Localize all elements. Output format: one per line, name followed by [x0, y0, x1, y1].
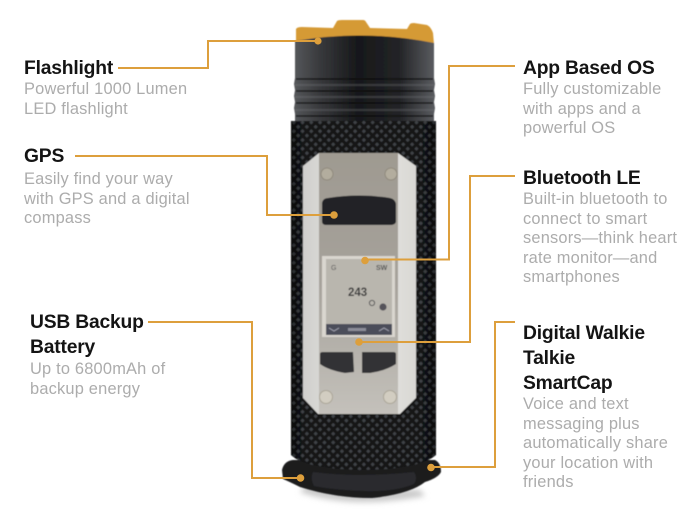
text block: Digital Walkie Talkie SmartCap: Voice and text	[523, 395, 629, 413]
text block: Digital Walkie Talkie SmartCap: automatically share	[523, 434, 668, 452]
text block: Digital Walkie Talkie SmartCap	[523, 323, 668, 491]
text block: Flashlight: Powerful 1000 Lumen	[24, 80, 187, 98]
text block: App Based OS	[523, 58, 661, 137]
device: gold top cap	[296, 20, 434, 44]
text block: Bluetooth LE: connect to smart	[523, 210, 647, 228]
device: steel front plate	[303, 153, 416, 414]
text block: GPS: with GPS and a digital	[24, 190, 190, 208]
text block: USB Backup Battery	[30, 312, 166, 398]
leader: walkie talkie	[427, 322, 515, 471]
text block: Flashlight: Flashlight	[24, 58, 113, 79]
text block: Digital Walkie Talkie SmartCap: Talkie	[523, 348, 575, 369]
device: knurled body	[291, 121, 436, 470]
text block: USB Backup Battery: Up to 6800mAh of	[30, 360, 165, 378]
text block: App Based OS: with apps and a	[523, 100, 641, 118]
text block: GPS: Easily find your way	[24, 170, 173, 188]
top button	[322, 196, 396, 225]
text block: Flashlight	[24, 58, 187, 118]
device: ground shadow	[300, 486, 425, 502]
leader: bluetooth	[355, 176, 515, 346]
text block: App Based OS: App Based OS	[523, 58, 655, 79]
text block: USB Backup Battery: backup energy	[30, 380, 140, 398]
text block: Digital Walkie Talkie SmartCap: SmartCap	[523, 373, 612, 394]
text block: App Based OS: Fully customizable	[523, 80, 661, 98]
text block: Bluetooth LE	[523, 168, 677, 286]
screen: 243	[348, 287, 367, 299]
text block: Digital Walkie Talkie SmartCap: Digital Walkie	[523, 323, 645, 344]
text block: GPS	[24, 146, 190, 227]
leader: app based OS	[361, 66, 515, 264]
text block: Bluetooth LE: rate monitor—and	[523, 249, 657, 267]
text block: Flashlight: LED flashlight	[24, 100, 128, 118]
leader: USB backup battery	[148, 322, 304, 482]
device: bottom cap	[282, 460, 441, 498]
screws	[320, 168, 397, 404]
device: black head with threads	[294, 35, 435, 122]
text block: Bluetooth LE: Bluetooth LE	[523, 168, 641, 189]
text block: USB Backup Battery: Battery	[30, 337, 95, 358]
text block: Bluetooth LE: smartphones	[523, 268, 620, 286]
bottom buttons	[320, 352, 354, 373]
text block: Digital Walkie Talkie SmartCap: your location with	[523, 454, 653, 472]
text block: Bluetooth LE: sensors—think heart	[523, 229, 677, 247]
text block: Bluetooth LE: Built-in bluetooth to	[523, 190, 668, 208]
text block: Digital Walkie Talkie SmartCap: friends	[523, 473, 574, 491]
screen: SW	[376, 265, 388, 272]
text block: Digital Walkie Talkie SmartCap: messaging plus	[523, 415, 640, 433]
text block: App Based OS: powerful OS	[523, 119, 615, 137]
screen: G	[331, 265, 336, 272]
screen	[322, 256, 395, 337]
text block: USB Backup Battery: USB Backup	[30, 312, 144, 333]
leader: flashlight	[118, 37, 322, 68]
text block: GPS: GPS	[24, 146, 64, 167]
leader: GPS	[75, 156, 338, 219]
text block: GPS: compass	[24, 209, 91, 227]
